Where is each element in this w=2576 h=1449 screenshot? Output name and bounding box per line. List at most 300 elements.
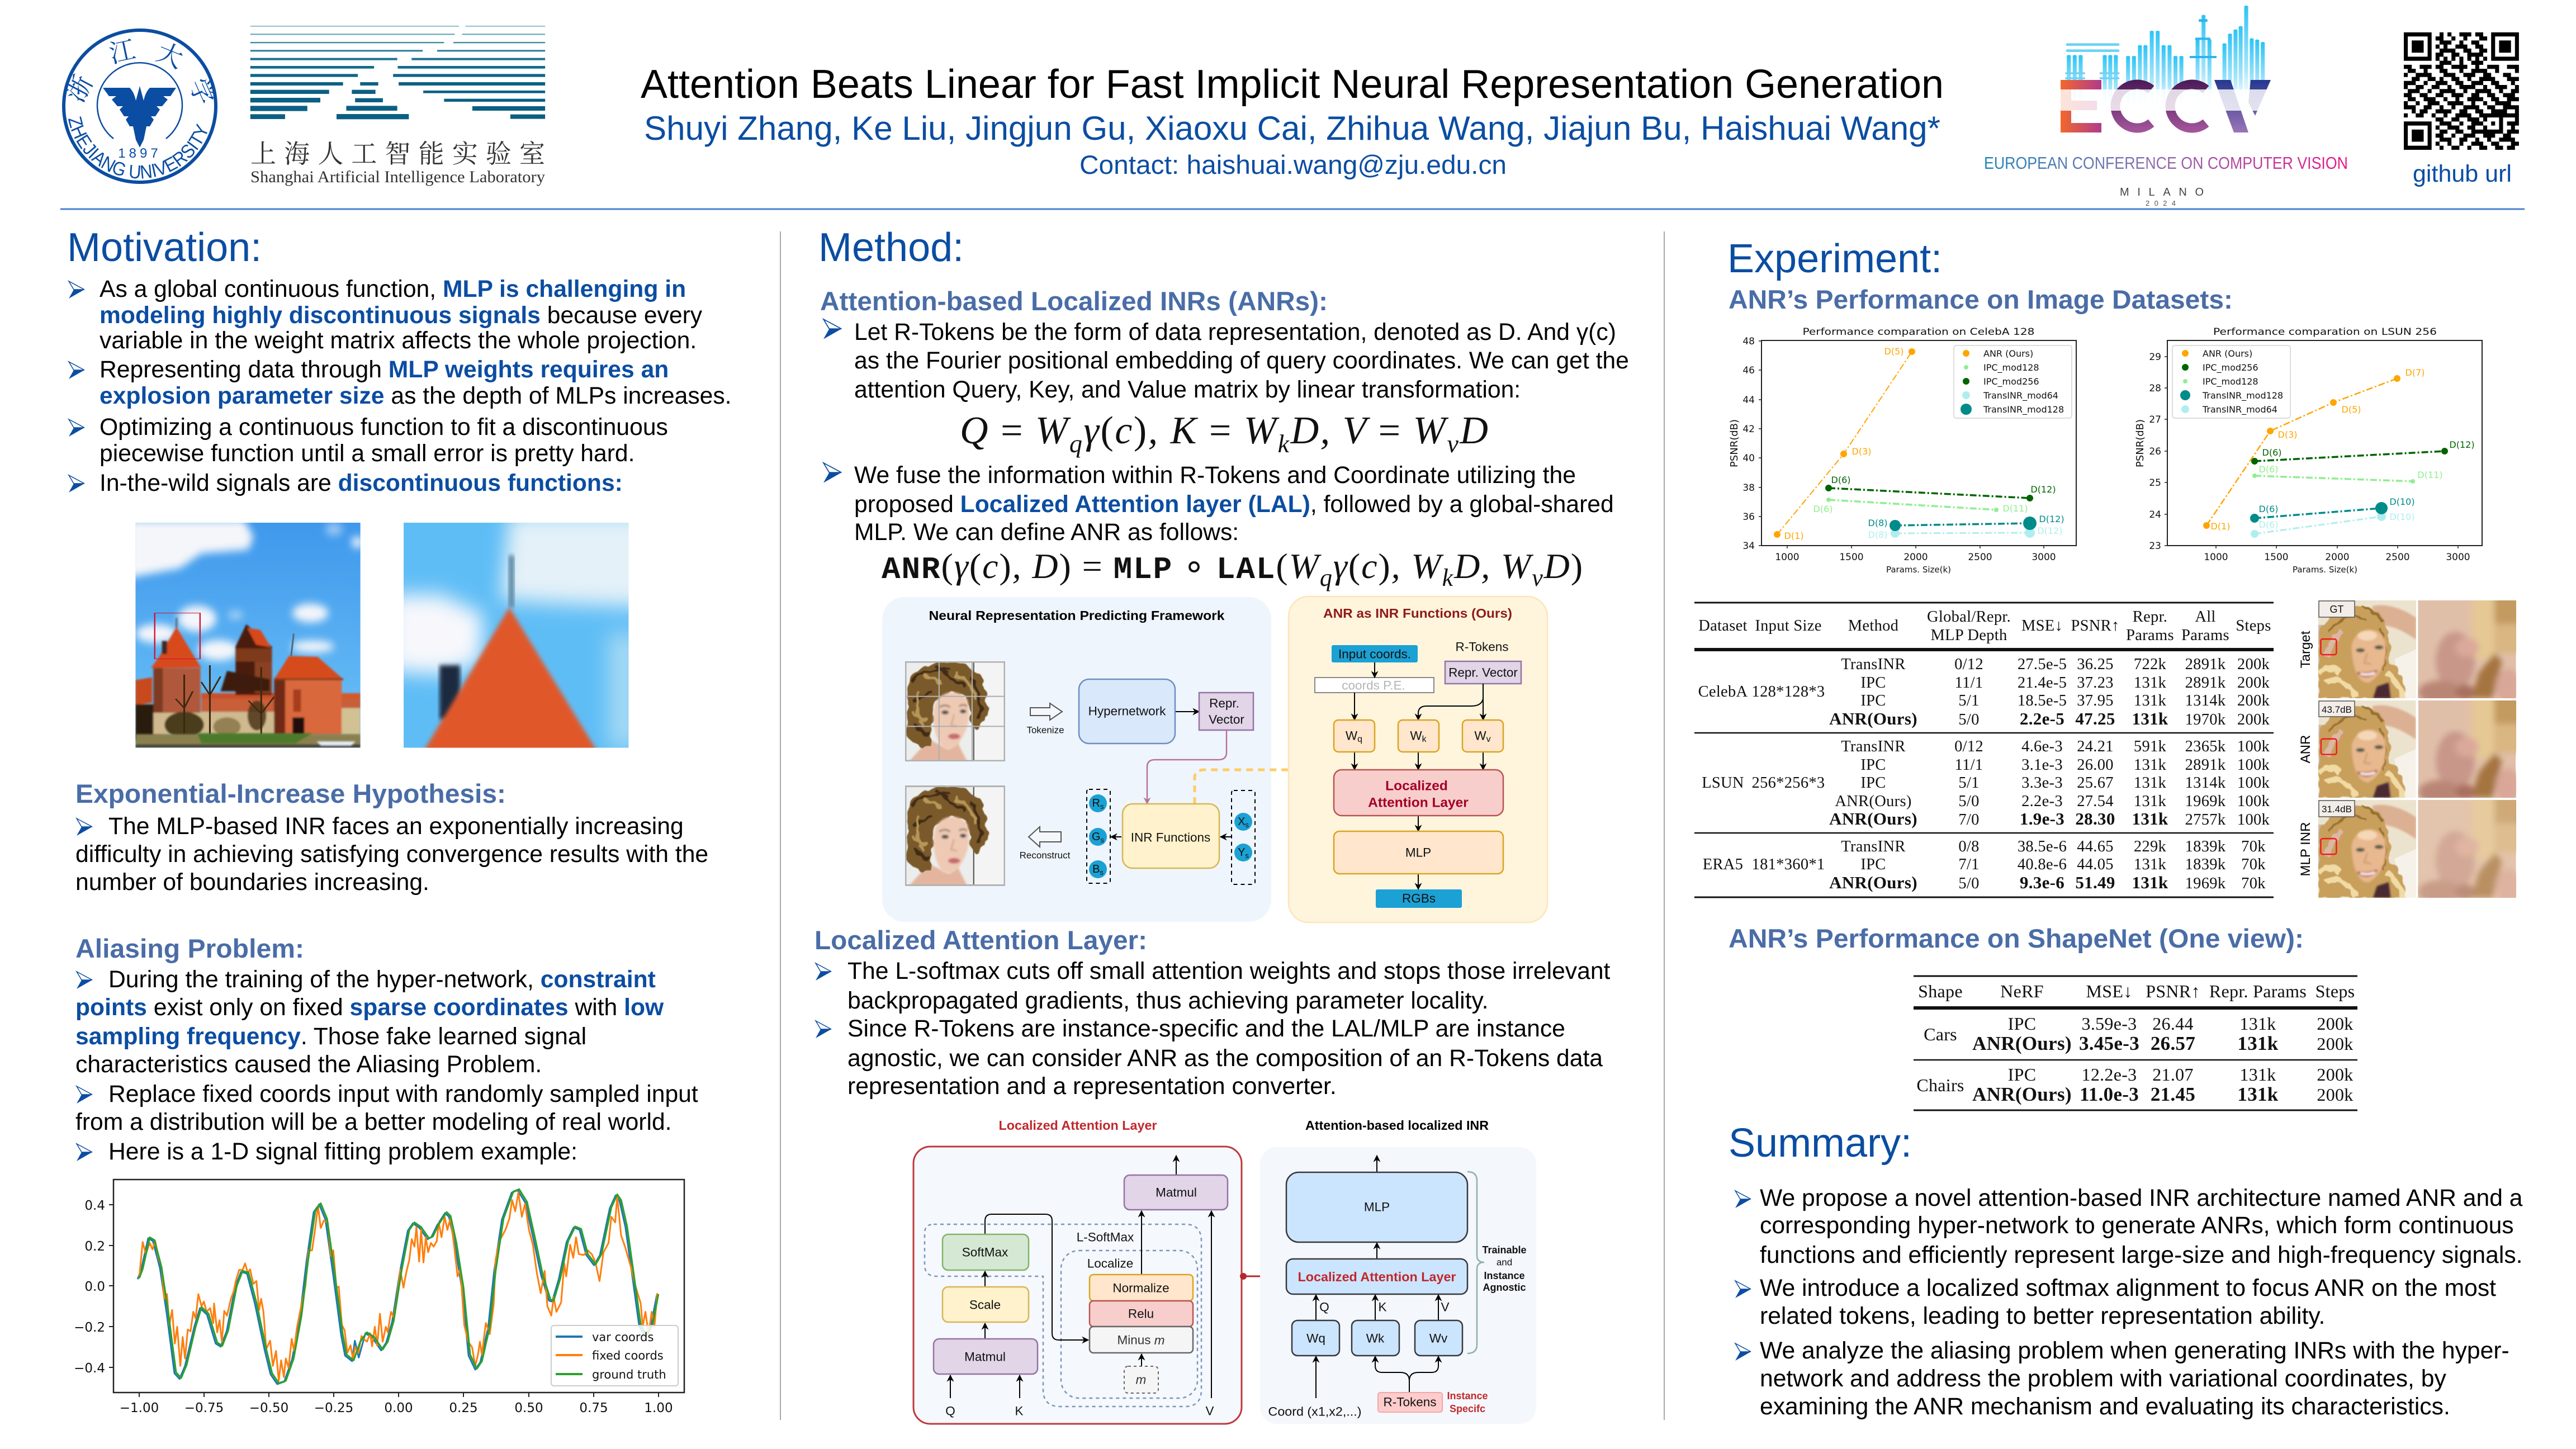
chart: LSUN 256: D(10)	[2389, 512, 2415, 522]
table: image dataset results: 7/0	[1958, 811, 1980, 828]
logo: Shanghai Artificial Intelligence Laboratory: Shanghai Artificial Intelligence Laboratory	[250, 168, 545, 186]
chart: 1-D signal fitting: 0.00	[384, 1401, 413, 1415]
labels: L-SoftMax and Localize: L-SoftMax	[1077, 1230, 1134, 1244]
table: image dataset results: TransINR	[1841, 656, 1906, 673]
panel: attention-based localized INR	[1260, 1147, 1536, 1424]
table: image dataset results: 2757k	[2185, 811, 2226, 828]
table: ShapeNet results: IPC	[2008, 1064, 2036, 1085]
equation: ANR: (c), W	[1348, 546, 1442, 586]
heading: attention-based localized INR diagram: Attention-based localized INR	[1305, 1118, 1489, 1133]
text block: motivation bullets: In-the-wild signals are discontinuous functions:	[100, 470, 623, 496]
table: image dataset results: 2891k	[2185, 656, 2226, 673]
panel: experiment	[1694, 236, 2523, 1420]
chart: LSUN 256: D(3)	[2278, 429, 2297, 440]
heading: framework: Neural Representation Predicting Framework	[929, 608, 1225, 623]
logo: Shanghai Artificial Intelligence Laboratory: 上海人工智能实验室	[250, 134, 545, 171]
equation: Q K V: γ	[1083, 409, 1100, 452]
chart: LSUN 256: D(11)	[2417, 470, 2443, 480]
equation: ANR: D	[1453, 546, 1481, 586]
box: normalize	[1090, 1275, 1193, 1301]
legend: TransINR_mod64	[2202, 404, 2277, 415]
table: image dataset results: Params	[2126, 627, 2174, 644]
chart: CelebA 128: 1500	[1839, 552, 1864, 563]
box: repr vector: Vector	[1209, 712, 1244, 727]
chart: LSUN 256: D(6)	[2259, 504, 2278, 514]
text block: motivation bullets: modeling highly discontinuous signals because every	[100, 302, 703, 329]
table: ShapeNet results: ANR(Ours)	[1972, 1083, 2072, 1105]
dashed region: L-SoftMax	[925, 1224, 1201, 1407]
chart: CelebA 128: D(8)	[1868, 529, 1887, 540]
table: image dataset results: 1970k	[2185, 711, 2226, 728]
labels: Q K V inputs: Q	[945, 1404, 955, 1418]
label: trainable and instance agnostic: Trainable	[1482, 1244, 1527, 1256]
equation: Q K V: q	[1069, 429, 1083, 458]
equation: ANR: ANR(γ(c), D) = MLP ∘ LAL(W	[882, 546, 1320, 588]
chart: 1-D signal fitting	[74, 1180, 684, 1415]
chart: CelebA 128: 36	[1742, 512, 1755, 523]
box: lower matmul: Matmul	[964, 1349, 1006, 1364]
box: repr vector: Repr. Vector	[1448, 665, 1518, 680]
table: image dataset results: IPC	[1860, 774, 1886, 792]
text block: motivation bullets	[69, 276, 732, 496]
box: repr vector: Repr.	[1209, 697, 1239, 710]
group: RGB output: B	[1092, 863, 1100, 875]
chart: CelebA 128: 48	[1742, 336, 1755, 347]
text block: aliasing: sampling frequency. Those fake learned signal	[75, 1023, 586, 1050]
equation: ANR: )	[1571, 546, 1584, 586]
row labels	[2298, 631, 2313, 876]
box: coords P.E.: coords P.E.	[1342, 679, 1405, 692]
equation: Q K V: D	[1459, 409, 1489, 452]
table: ShapeNet results: 3.45e-3	[2079, 1033, 2139, 1054]
boxes: W matrices: q	[1357, 735, 1362, 744]
text block: hypothesis: number of boundaries increasing.	[75, 869, 429, 896]
table: image dataset results: 1839k	[2185, 838, 2226, 855]
labels: Q K V inputs: K	[1015, 1404, 1024, 1418]
equation: Q K V: k	[1278, 429, 1291, 458]
chart: CelebA 128: 1000	[1775, 552, 1800, 563]
table: ShapeNet results: Repr. Params	[2209, 981, 2307, 1001]
label: coord: Coord (x1,x2,...)	[1268, 1404, 1362, 1419]
table: image dataset results: IPC	[1860, 856, 1886, 873]
table: image dataset results: All	[2195, 608, 2216, 626]
chart: CelebA 128: D(12)	[2030, 484, 2056, 495]
box: input coords: Input coords.	[1338, 647, 1411, 661]
table: ShapeNet results: Chairs	[1916, 1075, 1964, 1095]
table: image dataset results: 25.67	[2077, 774, 2114, 792]
text block: localized attention layer: backpropagated gradients, thus achieving parameter locality.	[847, 987, 1488, 1014]
github url label: github url	[2413, 160, 2512, 187]
table: image dataset results: Repr.	[2133, 608, 2167, 626]
table: image dataset results: 229k	[2134, 838, 2167, 855]
box: m: m	[1136, 1373, 1146, 1386]
equation: ANR: , W	[1481, 546, 1532, 586]
box: top matmul: Matmul	[1156, 1185, 1197, 1200]
table: image dataset results: 1969k	[2185, 875, 2226, 892]
boxes: W matrices: W	[1410, 729, 1422, 742]
chart: CelebA 128: D(6)	[1813, 504, 1832, 514]
group: XY input: s	[1245, 851, 1249, 860]
table: image dataset results: ANR(Ours)	[1835, 793, 1912, 810]
box: localized attention layer: Localized Attention Layer	[1298, 1270, 1456, 1284]
labels: L-SoftMax and Localize: Localize	[1087, 1257, 1133, 1270]
table: ShapeNet results: 131k	[2237, 1083, 2279, 1105]
table: image dataset results: 131k	[2134, 756, 2167, 774]
line: ground truth	[139, 1189, 659, 1383]
table: ShapeNet results: 200k	[2317, 1085, 2354, 1105]
table: image dataset results: 591k	[2134, 738, 2167, 755]
arrow: reconstruct	[1020, 827, 1071, 861]
labels: L-SoftMax and Localize	[1077, 1230, 1134, 1270]
equation: ANR: γ	[1333, 546, 1348, 586]
boxes: Wq Wk Wv: Wv	[1429, 1332, 1448, 1345]
chart: 1-D signal fitting: 0.2	[84, 1239, 105, 1254]
table: image dataset results: 131k	[2134, 856, 2167, 873]
chart: CelebA 128: PSNR(dB)	[1729, 419, 1740, 467]
group: RGB output: s	[1100, 802, 1104, 811]
boxes: W matrices: W	[1346, 729, 1357, 742]
chart: LSUN 256: D(6)	[2262, 447, 2281, 458]
logo: Shanghai Artificial Intelligence Laboratory	[250, 26, 545, 186]
text block: hypothesis: The MLP-based INR faces an exponentially increasing	[108, 813, 684, 840]
table: image dataset results: 51.49	[2075, 873, 2115, 892]
image: reconstructed portrait	[905, 785, 1005, 886]
arrow: tokenize	[1026, 703, 1064, 736]
text block: localized attention layer: agnostic, we can consider ANR as the composition of an R-Tokens data	[847, 1045, 1603, 1072]
table: image dataset results: 131k	[2132, 809, 2168, 828]
table: ShapeNet results: IPC	[2008, 1014, 2036, 1034]
box: localized attention layer: Attention Layer	[1368, 795, 1469, 811]
image: ANR row	[2319, 691, 2523, 803]
table: image dataset results: 11/1	[1955, 756, 1983, 774]
table: image dataset results: 2891k	[2185, 756, 2226, 774]
icon: QR code	[2404, 35, 2519, 148]
chart: 1-D signal fitting: 0.25	[449, 1401, 478, 1415]
text block: hypothesis	[75, 813, 708, 896]
group: RGB output: R	[1092, 797, 1100, 809]
table: image dataset results: 5/1	[1958, 692, 1980, 709]
panel: neural representation predicting framework	[882, 597, 1289, 922]
text block: motivation bullets: variable in the weight matrix affects the whole projection.	[100, 327, 697, 354]
box: repr vector	[1199, 693, 1253, 730]
label: instance specific: Instance	[1447, 1390, 1488, 1401]
table: ShapeNet results: 131k	[2237, 1033, 2279, 1054]
label: trainable and instance agnostic: Instance	[1484, 1270, 1525, 1281]
chart: CelebA 128: 46	[1742, 365, 1755, 376]
logo: ECCV: 2024	[2146, 199, 2176, 207]
chart: 1-D signal fitting: −1.00	[120, 1401, 159, 1415]
equation: ANR: D	[1543, 546, 1571, 586]
image: castle photo	[129, 520, 363, 748]
chart: LSUN 256: 26	[2149, 446, 2161, 457]
arrows: INR flow	[1316, 1156, 1438, 1398]
table: image dataset results: 131k	[2134, 692, 2167, 709]
table: image dataset results: 3.1e-3	[2021, 756, 2063, 774]
panel: localized attention layer diagram	[913, 1147, 1242, 1424]
table: image dataset results: MSE↓	[2021, 617, 2063, 634]
table: ShapeNet results: MSE↓	[2086, 981, 2132, 1001]
table: image dataset results: 4.6e-3	[2021, 738, 2063, 755]
text block: localized attention layer: The L-softmax cuts off small attention weights and stops those irrelevant	[847, 958, 1611, 984]
table: image dataset results: 2.2e-5	[2020, 709, 2064, 728]
chart: CelebA 128: D(8)	[1868, 518, 1887, 528]
boxes: Wq Wk Wv: Wk	[1366, 1332, 1385, 1345]
text block: summary bullets: We propose a novel attention-based INR architecture named ANR and a	[1760, 1185, 2523, 1211]
table: image dataset results: 2891k	[2185, 674, 2226, 692]
chart: 1-D signal fitting: −0.4	[74, 1361, 105, 1376]
table: ShapeNet results: 3.59e-3	[2082, 1014, 2137, 1034]
label: trainable and instance agnostic: and	[1497, 1257, 1512, 1268]
table: ShapeNet results: 21.45	[2151, 1083, 2195, 1105]
table: image dataset results: 70k	[2241, 875, 2266, 892]
table: image dataset results: 1314k	[2185, 774, 2226, 792]
text block: summary bullets: network and address the problem with variational coordinates, by	[1760, 1365, 2446, 1392]
table: image dataset results	[1694, 603, 2274, 897]
group: RGB output: s	[1101, 835, 1105, 844]
chart: LSUN 256: 28	[2149, 383, 2161, 394]
table: image dataset results: 100k	[2237, 774, 2270, 792]
box: input coords	[1332, 645, 1418, 662]
chart: CelebA 128: D(1)	[1784, 531, 1803, 541]
table: image dataset results: 5/0	[1958, 793, 1980, 810]
legend: IPC_mod256	[1983, 376, 2039, 387]
table: image dataset results: 1839k	[2185, 856, 2226, 873]
heading: aliasing problem: Aliasing Problem:	[75, 934, 304, 963]
box: softmax: SoftMax	[962, 1246, 1008, 1259]
chart: 1-D signal fitting: 0.4	[84, 1199, 105, 1213]
panel: motivation	[67, 225, 732, 1415]
table: image dataset results: 200k	[2237, 656, 2270, 673]
chart: LSUN 256: 29	[2149, 352, 2161, 363]
table: image dataset results: 5/1	[1958, 774, 1980, 792]
table: image dataset results: 37.23	[2077, 674, 2114, 692]
legend: ground truth	[592, 1368, 666, 1381]
heading: localized attention layer diagram: Localized Attention Layer	[998, 1118, 1157, 1133]
text block: motivation bullets: explosion parameter size as the depth of MLPs increases.	[100, 382, 732, 409]
table: image dataset results: CelebA	[1698, 683, 1748, 700]
image: tokenized portrait	[905, 661, 1005, 761]
labels: Q K V inputs	[945, 1404, 1214, 1418]
label: R-Tokens: R-Tokens	[1455, 640, 1509, 654]
legend: IPC_mod128	[2203, 376, 2258, 387]
connector: LAL to detail	[1240, 1273, 1286, 1280]
table: image dataset results: 2365k	[2185, 738, 2226, 755]
table: image dataset results: 28.30	[2075, 809, 2115, 828]
chart: LSUN 256: PSNR(dB)	[2134, 419, 2146, 467]
chart: 1-D signal fitting: −0.2	[74, 1320, 105, 1335]
chart: LSUN 256: 24	[2149, 509, 2161, 520]
box: coords P.E.	[1315, 678, 1434, 693]
table: image dataset results: 131k	[2132, 709, 2168, 728]
labels: Q K V: Q	[1319, 1300, 1329, 1314]
table: image dataset results: Dataset	[1698, 617, 1748, 634]
table: image dataset results: 40.8e-6	[2018, 856, 2067, 873]
row labels: MLP INR	[2298, 822, 2313, 876]
legend: TransINR_mod128	[2202, 390, 2283, 401]
label: trainable and instance agnostic: Agnostic	[1483, 1282, 1526, 1293]
legend: var coords	[592, 1330, 654, 1344]
chart: CelebA 128: 2000	[1903, 552, 1928, 563]
table: image dataset results: 70k	[2241, 856, 2266, 873]
chart: CelebA 128: D(5)	[1884, 346, 1903, 357]
table: ShapeNet results: Cars	[1924, 1024, 1957, 1044]
chart: CelebA 128: 42	[1742, 424, 1755, 435]
box: hypernetwork: Hypernetwork	[1088, 704, 1166, 718]
legend: ANR (Ours)	[1983, 348, 2033, 359]
chart: CelebA 128: D(3)	[1852, 446, 1871, 457]
chart: CelebA 128	[1729, 326, 2076, 575]
heading: ANR as INR functions: ANR as INR Functions (Ours)	[1323, 606, 1512, 621]
boxes: W matrices	[1334, 720, 1503, 752]
chart: LSUN 256: D(7)	[2405, 367, 2425, 378]
boxes: W matrices: k	[1422, 735, 1427, 744]
chart: LSUN 256: D(1)	[2211, 521, 2230, 532]
box: softmax	[943, 1234, 1029, 1270]
table: ShapeNet results: 21.07	[2152, 1064, 2194, 1085]
box: RGBs: RGBs	[1402, 891, 1436, 906]
chart: CelebA 128: Performance comparation on CelebA 128	[1802, 326, 2035, 338]
table: image dataset results: IPC	[1860, 674, 1886, 692]
table: image dataset results: 36.25	[2077, 656, 2114, 673]
text block: motivation bullets: piecewise function until a small error is pretty hard.	[100, 440, 634, 467]
image: ANR row: 43.7dB	[2322, 704, 2352, 715]
table: ShapeNet results: 26.44	[2152, 1014, 2194, 1034]
arrow: reconstruct: Reconstruct	[1020, 850, 1071, 861]
text block: ANR definition	[823, 319, 1629, 546]
chart: LSUN 256: D(6)	[2259, 464, 2278, 475]
table: image dataset results: 0/12	[1954, 656, 1983, 673]
chart: LSUN 256: 3000	[2446, 552, 2470, 563]
table: image dataset results: 11/1	[1955, 674, 1983, 692]
boxes: Wq Wk Wv: Wq	[1306, 1332, 1325, 1345]
chart: CelebA 128: 3000	[2032, 552, 2056, 563]
row labels: ANR	[2298, 735, 2313, 763]
text block: summary bullets: examining the ANR mechanism and evaluating its characteristics.	[1760, 1393, 2450, 1420]
table: image dataset results: 1314k	[2185, 692, 2226, 709]
image: target row: GT	[2330, 604, 2344, 615]
chart: LSUN 256: 1500	[2264, 552, 2289, 563]
chart: LSUN 256: D(12)	[2449, 439, 2475, 450]
box: RGBs	[1376, 889, 1462, 908]
panel: method	[815, 225, 1629, 1424]
table: image dataset results: 24.21	[2077, 738, 2114, 755]
box: lower matmul	[934, 1339, 1038, 1374]
table: image dataset results: Method	[1848, 617, 1898, 634]
logo: Zhejiang University seal: 1897	[118, 146, 162, 161]
logo: ECCV: MILANO	[2120, 186, 2204, 198]
legend	[2172, 345, 2290, 418]
box: R-Tokens	[1378, 1393, 1442, 1412]
table: ShapeNet results: 131k	[2239, 1064, 2276, 1085]
label: instance specific	[1447, 1390, 1488, 1414]
chart: 1-D signal fitting: 0.75	[579, 1401, 608, 1415]
box: relu: Relu	[1128, 1307, 1154, 1320]
table: image dataset results: 200k	[2237, 674, 2270, 692]
chart: LSUN 256: Params. Size(k)	[2293, 565, 2357, 575]
box: m	[1124, 1366, 1158, 1393]
table: image dataset results: 21.4e-5	[2018, 674, 2067, 692]
text block: motivation bullets: As a global continuous function, MLP is challenging in	[100, 276, 686, 302]
chart: CelebA 128: D(6)	[1831, 475, 1850, 485]
text block: localized attention layer	[816, 958, 1611, 1100]
table: image dataset results: MLP Depth	[1930, 627, 2007, 644]
panel: ANR as INR functions	[1289, 596, 1547, 922]
table: image dataset results: 18.5e-5	[2018, 692, 2067, 709]
chart: CelebA 128: 40	[1742, 453, 1755, 464]
equation: Q K V: , V = W	[1320, 409, 1447, 452]
logo: Zhejiang University seal: 浙	[55, 68, 100, 108]
text block: aliasing: During the training of the hyper-network, constraint	[108, 966, 656, 993]
chart: CelebA 128: 38	[1742, 482, 1755, 494]
chart: LSUN 256	[2134, 326, 2482, 575]
chart: 1-D signal fitting: 0.0	[84, 1280, 105, 1294]
image: zoomed castle tower	[390, 514, 655, 751]
box: scale: Scale	[969, 1298, 1001, 1311]
table: image dataset results: 1969k	[2185, 793, 2226, 810]
table: image dataset results: 27.5e-5	[2018, 656, 2067, 673]
chart: LSUN 256: 1000	[2204, 552, 2228, 563]
text block: aliasing	[75, 966, 698, 1165]
table: ShapeNet results: Steps	[2315, 981, 2355, 1001]
box: scale	[943, 1287, 1029, 1322]
image: target row	[2318, 590, 2523, 704]
table: ShapeNet results: 200k	[2317, 1064, 2354, 1085]
text block: summary bullets: functions and efficiently represent large-size and high-frequency signals.	[1760, 1242, 2523, 1268]
line: fixed coords	[139, 1192, 657, 1381]
table: ShapeNet results: 11.0e-3	[2080, 1083, 2139, 1105]
text block: aliasing: characteristics caused the Aliasing Problem.	[75, 1051, 542, 1078]
brace: trainable group	[1467, 1172, 1484, 1353]
authors: Shuyi Zhang, Ke Liu, Jingjun Gu, Xiaoxu Cai, Zhihua Wang, Jiajun Bu, Haishuai Wang*	[644, 110, 1940, 147]
table: image dataset results: 44.65	[2077, 838, 2114, 855]
label: trainable and instance agnostic	[1482, 1244, 1527, 1293]
table: image dataset results: 37.95	[2077, 692, 2114, 709]
table: ShapeNet results: 200k	[2317, 1034, 2354, 1054]
table: image dataset results: 3.3e-3	[2021, 774, 2063, 792]
box: localized attention layer: Localized	[1385, 778, 1448, 794]
row labels: Target	[2298, 631, 2313, 668]
equation: Q K V: D	[1290, 409, 1320, 452]
text block: summary bullets: We introduce a localized softmax alignment to focus ANR on the most	[1760, 1275, 2496, 1301]
table: image dataset results: 47.25	[2075, 709, 2115, 728]
labels: Q K V inputs: V	[1205, 1404, 1214, 1418]
box: MLP	[1286, 1172, 1467, 1242]
text block: aliasing: points exist only on fixed sparse coordinates with low	[75, 994, 664, 1021]
table: image dataset results: Params	[2181, 627, 2229, 644]
equation: ANR: k	[1442, 564, 1454, 591]
logo: Zhejiang University seal: 大	[151, 32, 190, 76]
logo: ECCV: EUROPEAN CONFERENCE ON COMPUTER VISION	[1984, 153, 2348, 173]
table: image dataset results: 131k	[2134, 674, 2167, 692]
logo: ECCV	[1984, 6, 2348, 207]
legend: IPC_mod256	[2203, 362, 2258, 373]
group: XY input: X	[1238, 816, 1245, 828]
table: image dataset results: ANR(Ours)	[1829, 809, 1917, 828]
table: image dataset results: LSUN	[1702, 774, 1744, 792]
table: image dataset results: 38.5e-6	[2018, 838, 2067, 855]
box: INR functions: INR Functions	[1131, 831, 1210, 844]
table: image dataset results: PSNR↑	[2071, 617, 2120, 634]
table: ShapeNet results: PSNR↑	[2146, 981, 2200, 1001]
group: XY input	[1232, 790, 1255, 884]
arrow: repr to INR	[1147, 730, 1227, 804]
box: relu	[1090, 1301, 1193, 1327]
chart: 1-D signal fitting: 1.00	[644, 1401, 673, 1415]
box: localized attention layer	[1334, 770, 1503, 816]
group: XY input: s	[1245, 821, 1249, 828]
image grid: reconstruction comparison	[2298, 590, 2523, 903]
box: minus m	[1090, 1327, 1193, 1353]
